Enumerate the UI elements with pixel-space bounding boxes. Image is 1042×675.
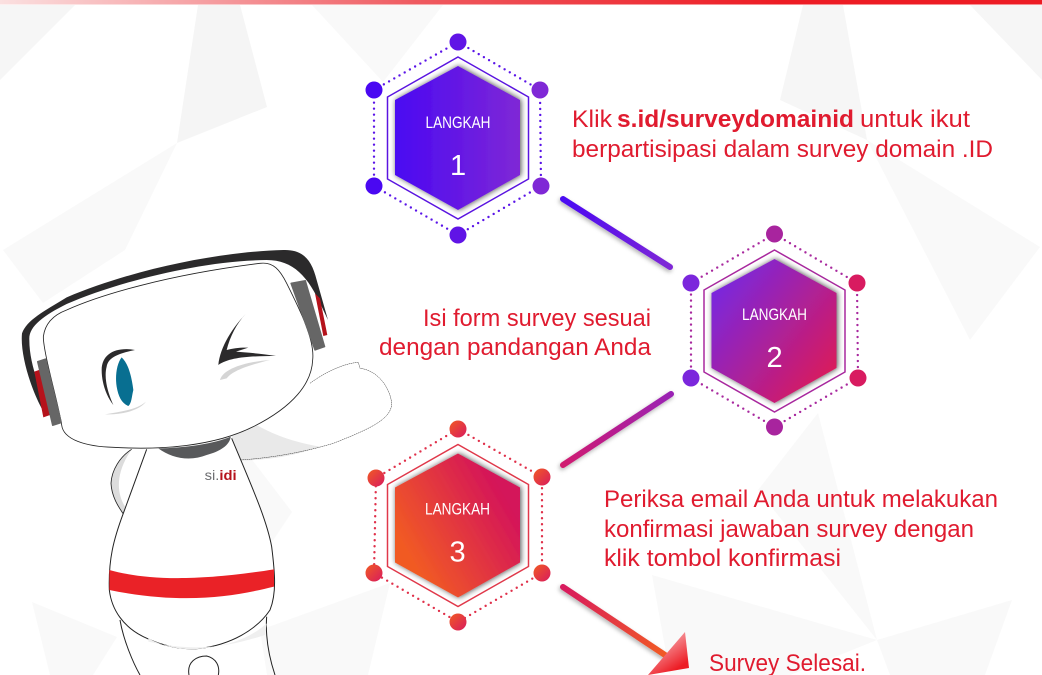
shirt logo: si.idi [205,467,237,483]
step 1 text: Klik [572,106,613,133]
step 2 text: Isi form survey sesuai [423,305,651,332]
step 3 hexagon [366,420,550,630]
left eye [102,349,146,414]
step 3 hexagon: 3 [449,536,466,568]
step 2 text: dengan pandangan Anda [379,334,652,361]
step 2 text [379,305,652,361]
step 1 text: berpartisipasi dalam survey domain .ID [572,136,993,163]
step 1 text: untuk ikut [860,106,970,133]
belt [109,569,274,598]
step 2 hexagon [682,226,866,436]
earpieces [34,281,327,425]
step 1 hexagon: 1 [450,150,466,182]
arm [232,362,392,461]
step 1 text [572,106,993,163]
winking eye [218,314,276,380]
head [43,263,313,448]
step 3 text: konfirmasi jawaban survey dengan [604,516,974,543]
step 1 text: s.id/surveydomainid [617,106,854,133]
step 3 text: Periksa email Anda untuk melakukan [604,486,998,513]
step 3 text [604,486,998,572]
step 1 hexagon [366,34,550,244]
step 3 hexagon: LANGKAH [425,500,490,518]
step 3 text: klik tombol konfirmasi [604,545,841,572]
mascot character [22,250,392,675]
neck [158,437,231,458]
arrow to finish [563,587,689,675]
connector line 2 [563,394,671,465]
step 2 hexagon: LANGKAH [742,305,807,324]
step 1 hexagon: LANGKAH [426,113,490,132]
step 2 hexagon: 2 [766,342,783,374]
body [109,437,275,675]
headband [22,250,328,408]
top red bar [0,0,1042,4]
connector line 1 [563,199,670,267]
